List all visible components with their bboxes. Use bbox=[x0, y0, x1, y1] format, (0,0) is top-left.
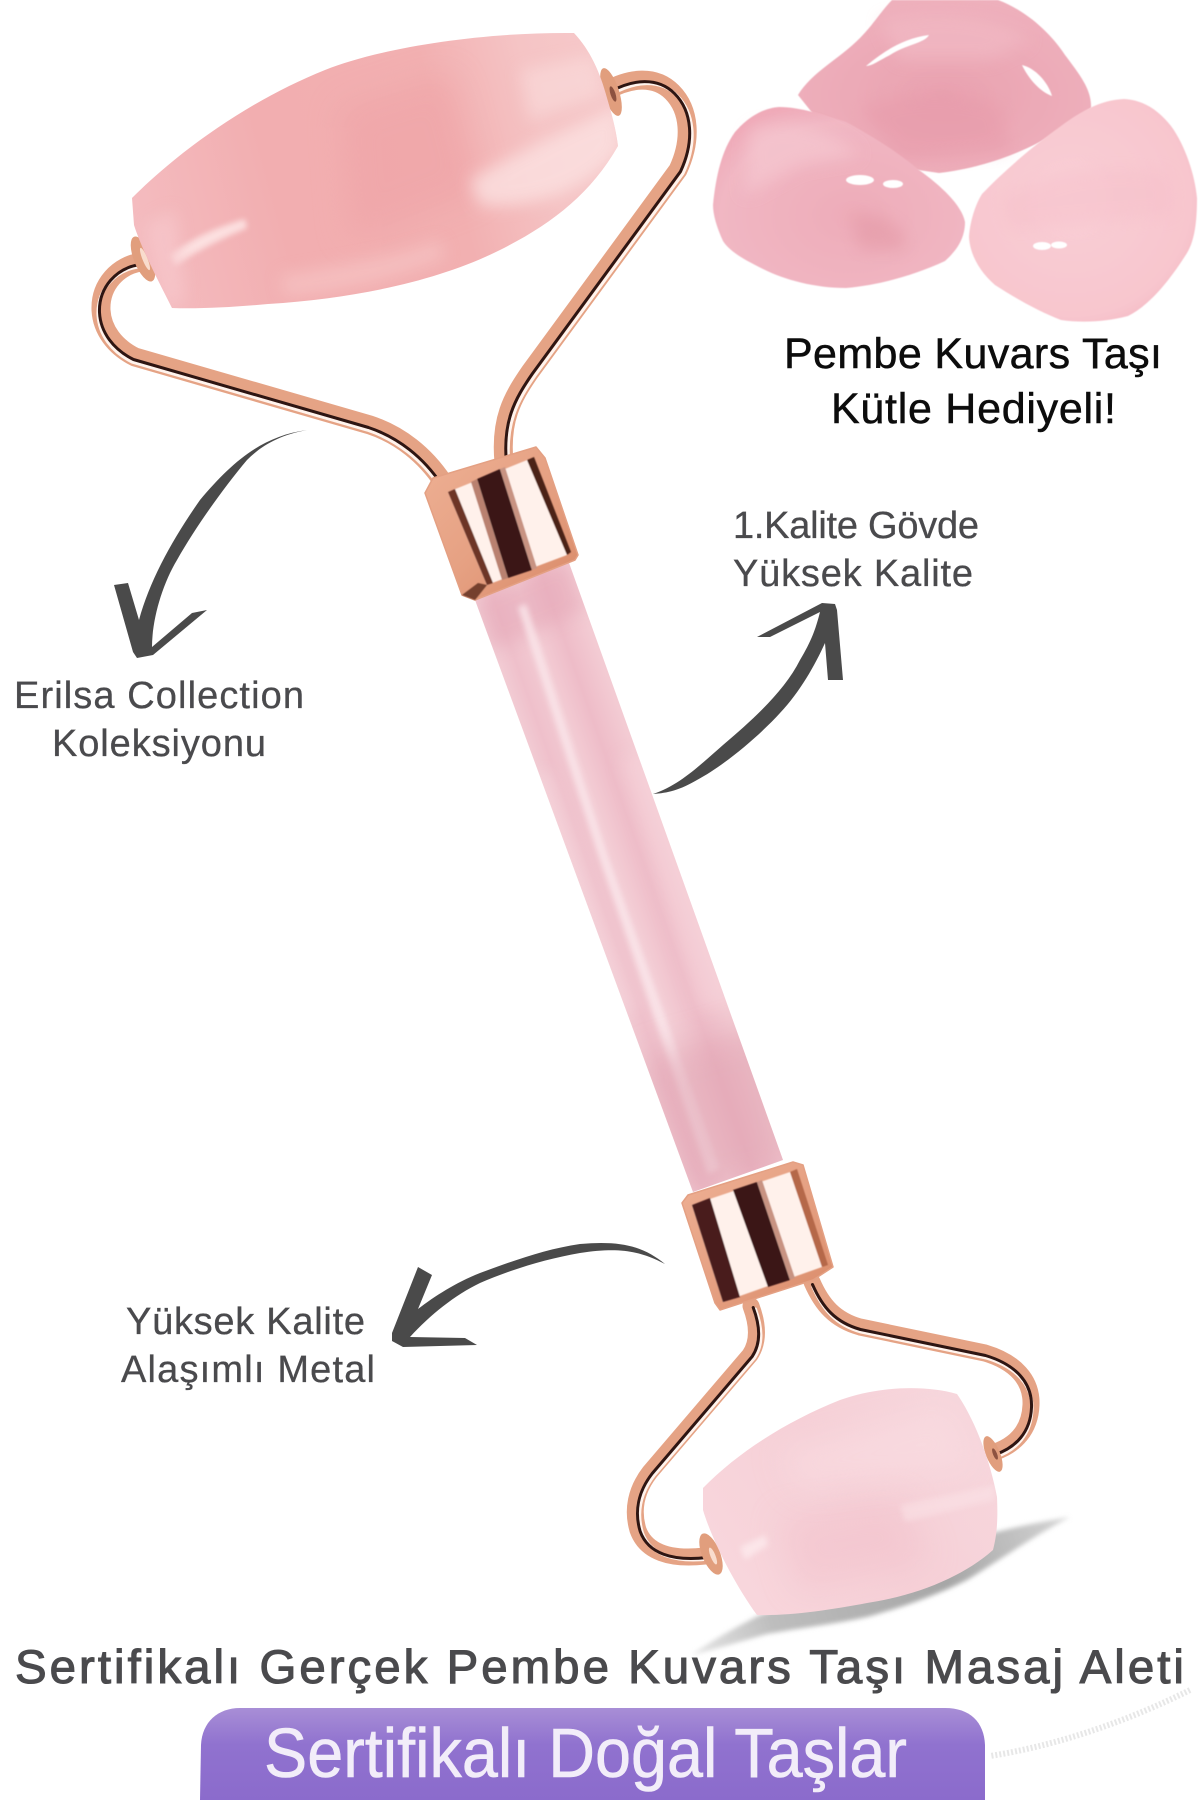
top frame pins bbox=[126, 66, 626, 285]
faint speckled noise curve bbox=[990, 1690, 1190, 1756]
callout: quality body: Yüksek Kalite bbox=[733, 553, 973, 595]
rose quartz facial roller bbox=[98, 33, 1032, 1615]
callout: stone gift: Kütle Hediyeli! bbox=[831, 385, 1116, 433]
top metal collar bbox=[425, 447, 578, 600]
callout: collection name bbox=[14, 675, 304, 765]
callout: alloy metal: Yüksek Kalite bbox=[126, 1301, 365, 1343]
back stone bbox=[798, 0, 1091, 173]
title: Sertifikalı Gerçek Pembe Kuvars Taşı Masaj Aleti bbox=[15, 1640, 1187, 1693]
callout: alloy metal: Alaşımlı Metal bbox=[121, 1349, 375, 1391]
badge: certified natural stones: Sertifikalı Doğal Taşlar bbox=[264, 1714, 907, 1792]
arrow: to metal label bbox=[392, 1243, 665, 1347]
shadow under small roller bbox=[692, 1517, 1070, 1655]
large roller head bbox=[132, 33, 620, 310]
rose quartz stones bbox=[713, 0, 1197, 322]
handle bbox=[475, 560, 800, 1200]
right stone bbox=[969, 99, 1197, 322]
callout: collection name: Erilsa Collection bbox=[14, 675, 304, 717]
arrow: to collection label bbox=[114, 430, 307, 658]
left stone bbox=[713, 107, 965, 288]
bottom frame pins bbox=[694, 1434, 1007, 1578]
callout: quality body bbox=[733, 505, 979, 595]
bottom frame wire bbox=[635, 1282, 1032, 1560]
callout: collection name: Koleksiyonu bbox=[52, 723, 266, 765]
small roller head bbox=[703, 1388, 997, 1615]
arrow: to quality body bbox=[653, 603, 843, 794]
callout: stone gift: Pembe Kuvars Taşı bbox=[784, 330, 1162, 378]
callout: quality body: 1.Kalite Gövde bbox=[733, 505, 979, 547]
bottom metal collar bbox=[682, 1162, 833, 1310]
top frame wire bbox=[98, 80, 692, 487]
callout: alloy metal bbox=[121, 1301, 375, 1391]
callout: stone gift bbox=[784, 330, 1162, 433]
